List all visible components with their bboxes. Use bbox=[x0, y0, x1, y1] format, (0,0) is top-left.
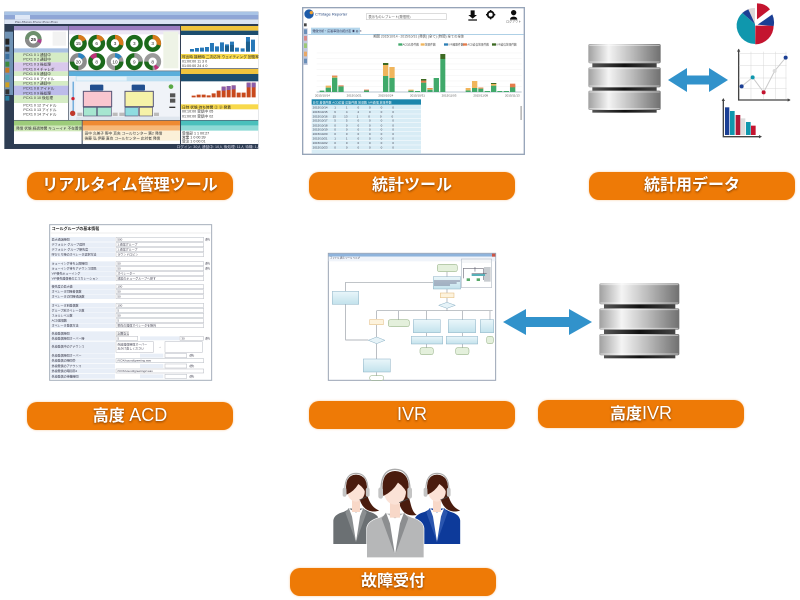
data table: 2015/10/17 5 5 0 0 0 0 bbox=[313, 119, 394, 123]
screenshot: statistics tool: 表示ものレブレート(発信別) bbox=[368, 14, 410, 19]
right call chart panel bbox=[181, 26, 259, 68]
label: IVR bbox=[309, 401, 515, 429]
label: statistics tool bbox=[309, 172, 515, 200]
data table bbox=[312, 99, 421, 154]
bottom teal panel: 受信部 1 1 00:27 bbox=[182, 131, 209, 136]
database: advanced IVR bbox=[599, 283, 679, 358]
form labels: 呼びとり時のオペレータ選択方法 bbox=[52, 252, 96, 257]
data table: 2015/10/20 0 0 0 0 0 0 bbox=[313, 132, 394, 136]
left agent panel: PCX1 0 3 後処理 bbox=[23, 62, 51, 67]
form values: 100 bbox=[117, 303, 123, 307]
form units: (秒) bbox=[205, 266, 210, 271]
chart legend: ACD応答件数 bbox=[403, 43, 419, 47]
right status chart panel: 日時 状態 待ち時間 ② ③ 発着 bbox=[182, 104, 231, 109]
chart legend: IVR着信放棄件数 bbox=[496, 43, 517, 47]
bar chart icon bbox=[722, 98, 762, 138]
form values: 現在の発信オペレータを除外 bbox=[117, 323, 156, 328]
screenshot: IVR flow editor: ファイル 表示 ツール ヘルプ bbox=[330, 256, 361, 260]
form labels: デフォルト グループ選択 bbox=[52, 242, 85, 247]
right call chart panel: 呼出時 接続時 二次応対 ウェイティング 回復率 bbox=[182, 54, 259, 59]
logo bbox=[304, 9, 348, 19]
form values bbox=[117, 237, 185, 373]
form labels: オペレータの同時通話数 bbox=[52, 294, 85, 299]
bottom orange panel bbox=[83, 121, 180, 144]
form units: (秒) bbox=[205, 236, 210, 241]
left agent panel: PCX1 0 6 アイドル bbox=[23, 76, 55, 81]
screenshot: statistics tool bbox=[303, 8, 524, 154]
data table: 2015/10/22 0 0 0 0 0 0 bbox=[313, 141, 394, 145]
screenshot: realtime management tool: Ptsx /Pkxxxx /Pxxxx /Pxxx /Pxxx bbox=[15, 20, 58, 24]
form labels: 外線発信時間 bbox=[52, 331, 70, 336]
form values: 50 bbox=[117, 267, 121, 271]
left agent panel bbox=[14, 26, 68, 120]
form labels: 外線発信時間オーバー bbox=[52, 353, 81, 358]
call center agents bbox=[333, 469, 460, 558]
screenshot: realtime management tool bbox=[4, 12, 261, 149]
form labels: 外線発信の時間帯2 bbox=[52, 368, 78, 373]
form labels: スキルレベル数 bbox=[52, 312, 73, 317]
form labels: 外線発信時間オーバー時 bbox=[52, 335, 84, 340]
label: IVR: IVR bbox=[397, 404, 427, 424]
form values: 1.通常グループ bbox=[117, 242, 138, 247]
group donut panel: 3 bbox=[151, 41, 154, 46]
form values: オペレーター bbox=[117, 271, 135, 276]
form label column bbox=[51, 237, 115, 379]
data table: 2015/10/23 0 0 0 0 0 0 bbox=[313, 145, 394, 149]
stacked bar chart: 2015/10/31 bbox=[410, 94, 425, 98]
agent: left bbox=[333, 473, 379, 544]
form labels: 優先度の最大値 bbox=[52, 284, 73, 289]
form values: 5 bbox=[117, 308, 119, 312]
chart legend: 放棄件数 bbox=[425, 43, 436, 47]
left agent panel: 25 bbox=[31, 37, 36, 42]
form labels: キューイング待ち上限時間 bbox=[52, 261, 87, 266]
form labels: グループ別オペレータ数 bbox=[52, 307, 84, 312]
right status chart panel: 00:10:00 受話中 05 bbox=[182, 109, 213, 114]
double arrow: database to charts bbox=[668, 68, 728, 92]
form labels: 外線発信の待機時間 bbox=[52, 373, 79, 378]
form values: 上限なし bbox=[117, 331, 129, 336]
form values: ラウンドロビン bbox=[117, 252, 138, 257]
label: statistics data: 統計用データ bbox=[644, 177, 740, 194]
form values: 50 bbox=[117, 262, 121, 266]
pie chart icon bbox=[737, 3, 774, 44]
left agent panel: PCX1 0 5 通話中 bbox=[23, 71, 51, 76]
agent: center bbox=[367, 469, 424, 558]
stacked bar chart: 2015/11/03 bbox=[442, 94, 457, 98]
right call chart panel: 01:00:00 11 3 0 bbox=[182, 60, 207, 64]
form values: 50 bbox=[117, 313, 121, 317]
form values: 1.通常グループ bbox=[117, 247, 138, 252]
form labels: VIP優先発信者のエスカレーション bbox=[52, 276, 98, 281]
form values: /VOX/sound/greeting2.wav bbox=[117, 369, 153, 373]
label: statistics tool: 統計ツール bbox=[372, 177, 452, 194]
form units: → bbox=[158, 345, 161, 349]
form values: 外線発信時間オーバー bbox=[117, 341, 147, 346]
form labels bbox=[52, 236, 98, 378]
left agent panel: PCX1 0 14 アイドル bbox=[23, 112, 57, 117]
database: statistics data bbox=[588, 44, 661, 113]
screenshot: statistics tool: 期間 2015/10/14 - 2015/10/31 (発信) (全て) (時間) 全ての全体 bbox=[373, 34, 465, 39]
chart legend: ACD着信放棄件数 bbox=[467, 43, 489, 47]
bottom orange panel: 田中 久美子 野中 真央 コールセンター 第2 発信 bbox=[85, 131, 163, 136]
left agent panel: PCX1 0 4 チャレポ bbox=[23, 66, 55, 71]
right status chart panel: 01:00:00 受話中 02 bbox=[182, 113, 213, 118]
group donut panel bbox=[69, 26, 180, 71]
form values: /VOX/sound/greeting.wav bbox=[117, 359, 152, 363]
label: advanced IVR bbox=[538, 400, 744, 428]
data table: 2015/10/16 15 13 1 0 0 0 bbox=[313, 114, 393, 118]
right status chart panel bbox=[181, 69, 258, 120]
form values: 通常のキューグループへ戻す bbox=[117, 276, 156, 281]
icons: download, settings, user bbox=[468, 10, 521, 24]
left agent panel: PCX1 0 8 アイドル bbox=[23, 85, 55, 90]
group donut panel: 3 bbox=[114, 41, 117, 46]
label: help desk bbox=[290, 568, 496, 596]
data table: 2015/10/14 1 1 0 0 0 0 bbox=[313, 105, 394, 109]
form values: おかけ直しください bbox=[117, 345, 144, 350]
form labels: 外線発信のアナウンス bbox=[52, 363, 81, 368]
bottom orange panel: 後藤 弘 伊藤 直也 コールセンター 応対者 発信 bbox=[85, 135, 161, 140]
group donut panel: 8 bbox=[151, 59, 154, 64]
group donut panel: 3 bbox=[133, 41, 136, 46]
seat map panel bbox=[69, 71, 180, 120]
form values: 50 bbox=[117, 290, 121, 294]
bottom teal panel: 受注 1 0 00:01 bbox=[182, 139, 206, 144]
form labels: オペレータ別発信数 bbox=[52, 302, 79, 307]
form units: (秒) bbox=[205, 335, 210, 340]
screenshot: IVR flow editor bbox=[328, 253, 496, 380]
double arrow: IVR to database bbox=[503, 309, 592, 335]
form labels: ACD発信数 bbox=[52, 318, 67, 323]
flow nodes bbox=[332, 277, 494, 372]
form units: (秒) bbox=[189, 363, 194, 368]
bottom teal panel: 営業 1 0 00:39 bbox=[182, 135, 206, 140]
label: advanced IVR: 高度IVR bbox=[610, 403, 672, 423]
right call chart panel: 01:00:00 24 4 0 bbox=[182, 64, 207, 68]
data table: 2015/10/19 0 0 0 0 0 0 bbox=[313, 128, 394, 132]
data table: 2015/10/21 1 1 0 0 0 0 bbox=[313, 137, 394, 141]
bottom teal panel bbox=[181, 121, 258, 144]
chart legend: IVR離脱件数 bbox=[448, 43, 464, 47]
data table: 日付 着信件数 ACD応答 応答件数 放棄数 IVR着信 放棄件数 bbox=[313, 99, 392, 104]
label: advanced ACD: 高度 ACD bbox=[93, 405, 167, 425]
line chart icon bbox=[737, 49, 791, 102]
form units: (秒) bbox=[205, 261, 210, 266]
data table: 2015/10/15 6 4 2 0 0 0 bbox=[313, 110, 394, 114]
form values: 50 bbox=[117, 295, 121, 299]
group donut panel: 9 bbox=[133, 59, 136, 64]
chart legend bbox=[398, 43, 517, 47]
stacked bar chart bbox=[315, 53, 522, 98]
group donut panel: 6 bbox=[95, 41, 98, 46]
left agent panel: PCX1 0 2 通話中 bbox=[23, 57, 51, 62]
left agent panel: PCX1 0 7 通話中 bbox=[23, 81, 51, 86]
group donut panel: 20 bbox=[76, 59, 81, 64]
left agent panel: PCX1 0 10 後処理 bbox=[23, 95, 53, 100]
form units bbox=[158, 236, 210, 378]
form values: 5 bbox=[117, 319, 119, 323]
form labels: キューイング待ちアナウンス間隔 bbox=[52, 266, 96, 271]
form values: 500 bbox=[117, 237, 123, 241]
bottom green panel bbox=[14, 121, 86, 144]
form units: (秒) bbox=[189, 373, 194, 378]
stacked bar chart: 2015/10/21 bbox=[347, 94, 362, 98]
flow connectors bbox=[346, 272, 493, 376]
form values: 5 bbox=[117, 336, 119, 340]
screenshot: advanced ACD settings form: コールグループの基本情報 bbox=[52, 225, 99, 231]
form values: 30 bbox=[181, 336, 185, 340]
stacked bar chart: 2015/11/09 bbox=[473, 94, 488, 98]
icons: download, settings, user: ログアウト bbox=[506, 19, 521, 24]
bottom green panel: 発信 状態 経過時間 キューイド 不在着信者 bbox=[16, 126, 86, 131]
agent: right bbox=[414, 473, 460, 544]
label: statistics data bbox=[589, 172, 795, 200]
screenshot: realtime management tool: ログイン: 30人 通話中: 10人 後処理: 11人 待機: 1人 bbox=[177, 144, 261, 149]
screenshot: advanced ACD settings form bbox=[50, 225, 212, 380]
form labels: 外線発信中のアナウンス bbox=[52, 344, 84, 349]
group donut panel: 8 bbox=[95, 59, 98, 64]
form units: (秒) bbox=[189, 353, 194, 358]
left agent panel: PCX1 0 13 アイドル bbox=[23, 107, 57, 112]
group donut panel: 15 bbox=[76, 41, 81, 46]
form labels: オペレータ同時着信数 bbox=[52, 289, 82, 294]
form labels: VIP優先キューイング bbox=[52, 271, 80, 276]
flow minimap bbox=[461, 259, 492, 288]
left agent panel: PCX1 0 1 通話中 bbox=[23, 52, 51, 57]
data table: 2015/10/18 0 0 0 0 0 0 bbox=[313, 123, 394, 127]
form inputs bbox=[116, 237, 204, 378]
group donut panel: 10 bbox=[112, 59, 118, 64]
label: advanced ACD bbox=[27, 402, 233, 430]
label: help desk: 故障受付 bbox=[361, 573, 425, 590]
stacked bar chart: 2015/11/13 bbox=[505, 94, 520, 98]
form values: 100 bbox=[117, 285, 123, 289]
form labels: デフォルト グループ優先度 bbox=[52, 247, 88, 252]
logo: CTStage Reporter bbox=[315, 12, 348, 17]
left agent panel: PCX1 0 9 後処理 bbox=[23, 90, 51, 95]
stacked bar chart: 2015/10/24 bbox=[378, 94, 394, 98]
stacked bar chart: 2015/10/14 bbox=[315, 94, 330, 98]
label: realtime management tool bbox=[27, 172, 233, 200]
screenshot: statistics tool: 発信分析・応答率別の統計表 ◉ ◍ ✕ bbox=[312, 28, 362, 33]
form labels: 外線発信の時間帯 bbox=[52, 358, 76, 363]
form labels: 最大通話時間 bbox=[52, 236, 70, 241]
label: realtime management tool: リアルタイム管理ツール bbox=[42, 177, 218, 194]
left agent panel: PCX1 0 12 アイドル bbox=[23, 103, 57, 108]
form labels: オペレータ発信方法 bbox=[52, 323, 79, 328]
